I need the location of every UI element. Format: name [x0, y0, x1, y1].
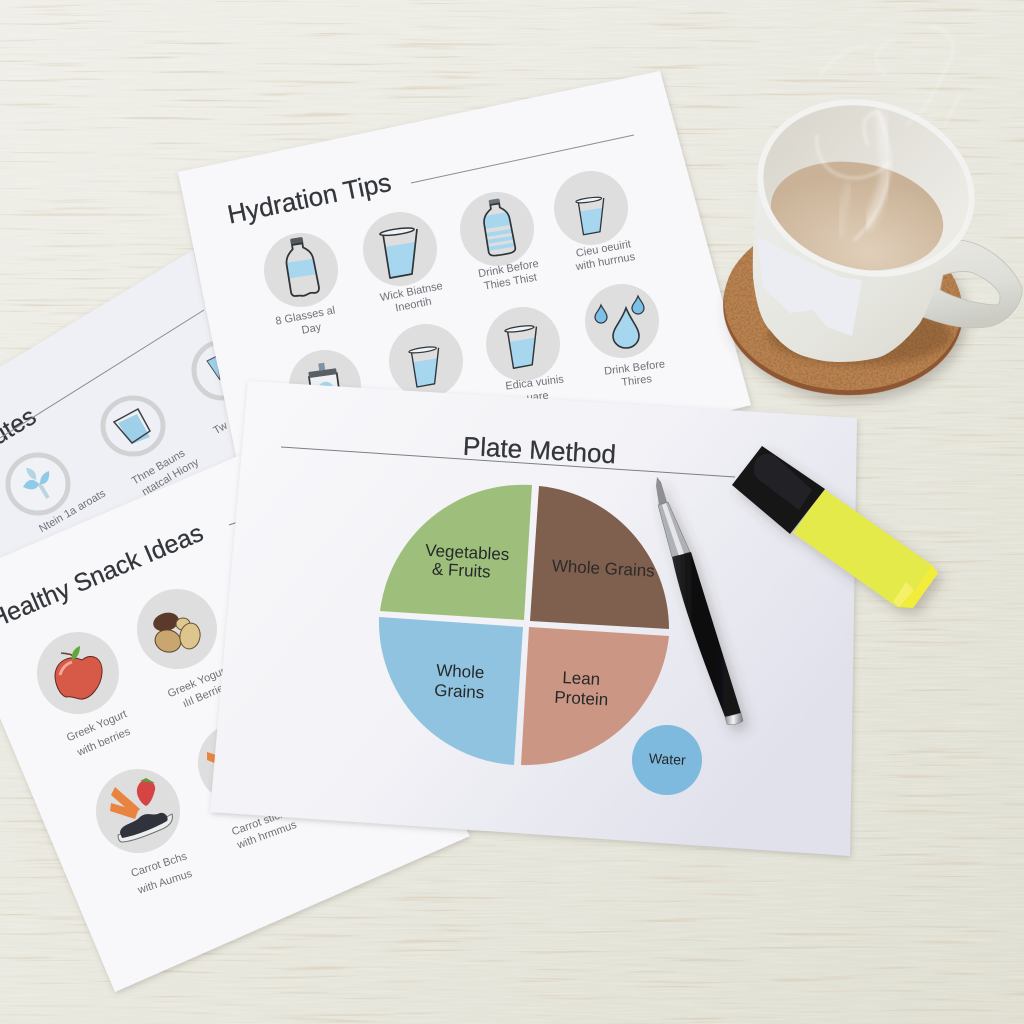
icon: apple: [37, 632, 119, 714]
label: glass 1 caption: Ineortih: [394, 296, 433, 314]
label: partly hidden caption: with hrmmus: [235, 819, 299, 852]
label: Drink Before: Thies Thist: [483, 271, 538, 293]
label: glass caption: ntatcal Hiony: [140, 456, 201, 498]
label: Carrot sticks with hummus: Carrot Bchs: [130, 850, 189, 880]
label: glass 2 caption: [574, 238, 637, 273]
segment: whole grains blue: Whole: [436, 661, 485, 682]
coffee mug: [752, 100, 1022, 368]
mug rim and interior: [737, 75, 995, 301]
label: 8 Glasses: 8 Glasses al: [275, 304, 336, 328]
tea surface: [770, 162, 944, 270]
label: glass 4 caption: uare: [526, 390, 549, 404]
cork coaster: [717, 212, 969, 403]
segment: lean protein: Protein: [554, 688, 609, 709]
icon: mixed nuts: [137, 589, 217, 669]
icon: water drops: [585, 284, 659, 358]
label: drops caption: [604, 358, 666, 389]
segment: vegetables and fruits: Vegetables: [425, 541, 510, 564]
label: Greek Yogurt with berries: Greek Yogurt: [65, 708, 129, 744]
panel: Hydration Tips sheet: [178, 71, 751, 520]
label: glass 1 caption: Wick Biatnse: [379, 280, 444, 304]
label: glass caption: Thne Bauns: [130, 447, 188, 487]
highlighter cap: [732, 446, 825, 534]
highlighter body: [793, 489, 938, 608]
highlighter: [732, 446, 938, 608]
label: 8 Glasses: Day: [301, 321, 323, 337]
icon: glass 4: [486, 307, 560, 381]
label: glass 4 caption: [505, 373, 565, 404]
heading: Hydration Tips: Hydration Tips: [225, 167, 394, 229]
label: partly hidden caption: Carrot sticks: [230, 806, 292, 838]
icon: partial ring: [194, 342, 250, 398]
label: glass 2 caption: Cieu oeuirit: [575, 238, 632, 260]
callout: water circle: Water: [648, 750, 686, 768]
label: glass 4 caption: Edica vuinis: [505, 373, 565, 393]
segment: whole grains blue: Grains: [434, 681, 485, 702]
rising steam: [817, 25, 960, 240]
label: Carrot sticks with hummus: [130, 850, 194, 897]
icon: glass 2: [554, 171, 628, 245]
mug handle: [923, 240, 1022, 328]
pen: [656, 477, 743, 725]
segment: vegetables and fruits: & Fruits: [432, 559, 491, 582]
label: glass 1 caption: [379, 280, 444, 314]
segment: lean protein: [521, 627, 669, 765]
label: Greek Yogurt with berries: [65, 708, 133, 759]
icon: carrots, strawberry and plate: [96, 769, 180, 853]
label: partly hidden caption: [230, 806, 299, 852]
heading: Plate Method: Plate Method: [462, 431, 617, 469]
label: Drink Before: [477, 258, 540, 293]
callout: water circle: [632, 725, 702, 795]
panel: Plate Method sheet: [210, 381, 857, 856]
icon: partly hidden snack: [198, 723, 278, 803]
icon: glass in ring: [103, 398, 163, 454]
label: partial caption: Tw: [211, 420, 230, 437]
icon: water flask, second row: [289, 350, 361, 422]
label: drops caption: Thires: [621, 373, 653, 389]
icon: striped bottle: [460, 192, 534, 266]
label: nuts caption: Greek Yogurt: [166, 664, 230, 700]
icon: glass 1: [363, 212, 437, 286]
label: glass 2 caption: with hurrnus: [574, 251, 637, 273]
mug body: [753, 180, 973, 362]
segment: whole grains brown: Whole Grains: [551, 556, 655, 581]
segment: vegetables and fruits: [380, 485, 532, 620]
chart: plate method pie: [379, 485, 669, 765]
label: sprout caption: Ntein 1a aroats: [37, 487, 108, 535]
panel: Healthy Snack Ideas sheet: [0, 453, 470, 992]
label: Drink Before: Drink Before: [477, 258, 540, 280]
panel: sheet with cut-off "...utes" heading: [0, 250, 250, 565]
icon: bottle: [264, 233, 338, 307]
label: Greek Yogurt with berries: with berries: [75, 726, 133, 759]
label: nuts caption: ılıl Berries: [181, 680, 231, 710]
segment: lean protein: Lean: [562, 668, 601, 689]
label: Carrot sticks with hummus: with Aumus: [136, 868, 194, 897]
icon: sprout in ring: [8, 455, 68, 513]
segment: whole grains brown: [530, 486, 669, 629]
mug shadow on coaster: [768, 305, 952, 365]
label: drops caption: Drink Before: [604, 358, 666, 378]
icon: glass 3: [389, 324, 463, 398]
segment: whole grains blue: [379, 617, 523, 765]
